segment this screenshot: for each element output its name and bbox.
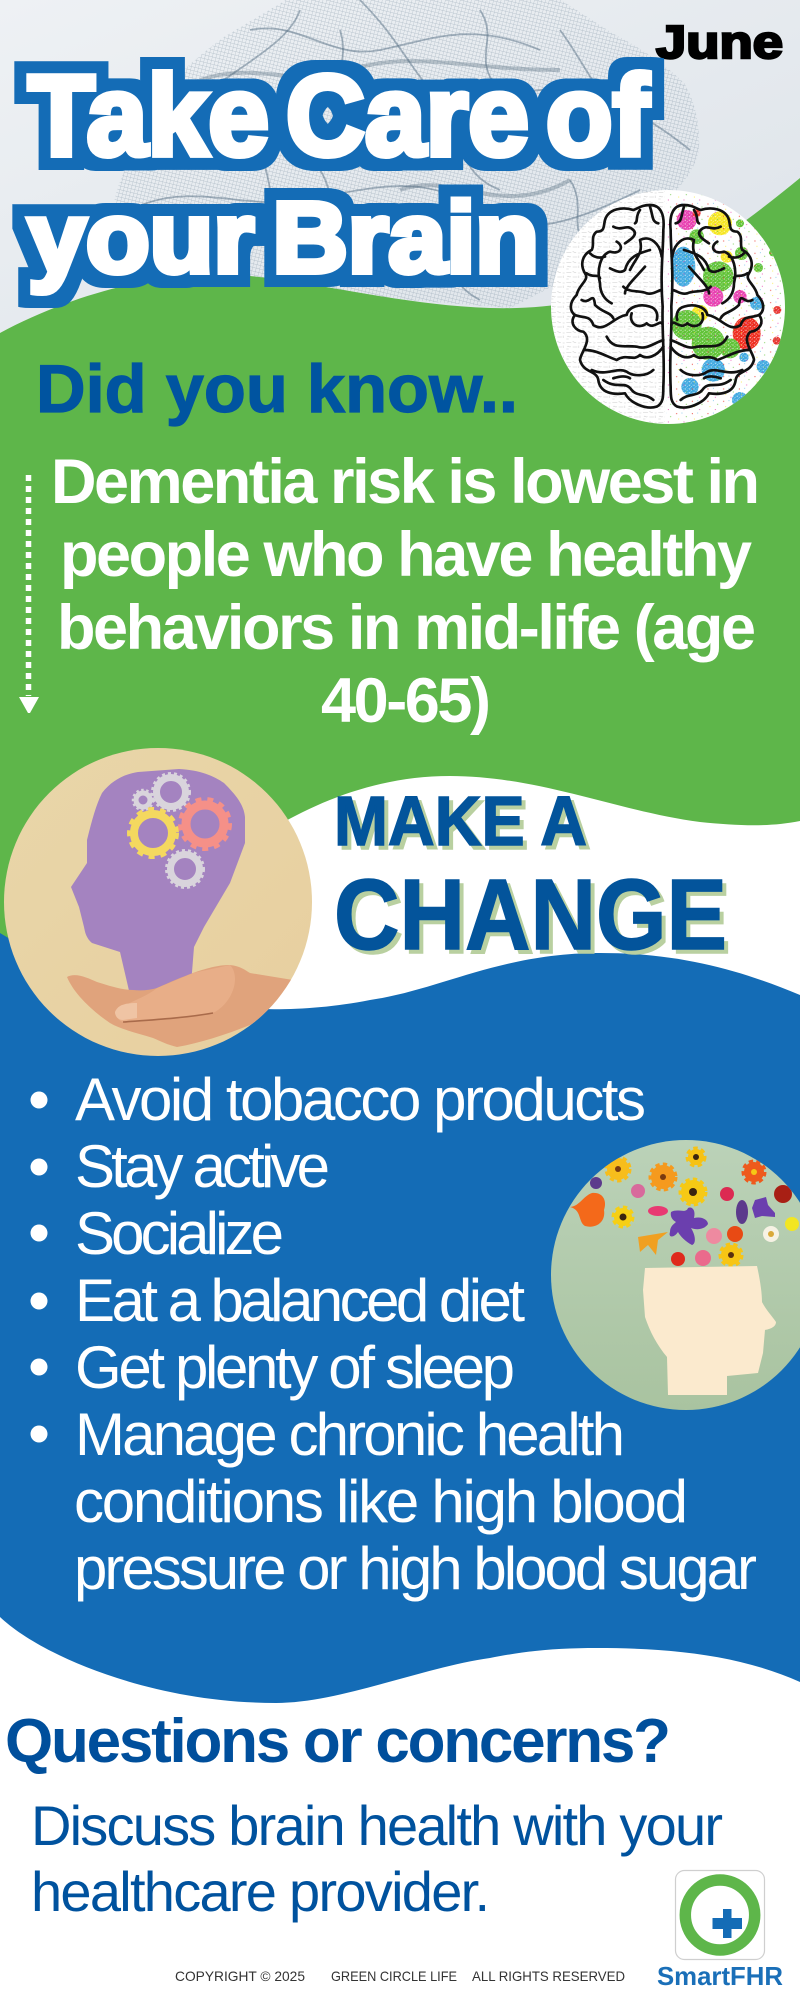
math scribble background [550,190,665,430]
make a: MAKE A [334,782,587,860]
discuss line 2: healthcare provider. [31,1860,490,1923]
title [28,53,650,294]
copyright: COPYRIGHT © 2025 [175,1968,305,1984]
bullet 5: Get plenty of sleep [75,1334,515,1401]
gears [129,774,230,888]
change shadow: CHANGE [338,863,731,975]
logo tile [676,1870,764,1960]
heading: did you know: Did you know.. [36,351,518,427]
bullet 6: Manage chronic health [75,1401,625,1468]
arrow: dotted down [19,475,39,713]
brain right hemisphere [670,205,763,408]
organisation: GREEN CIRCLE LIFE [331,1968,457,1984]
fact line 2: people who have healthy [60,520,752,590]
bullet 2: Stay active [75,1133,330,1200]
cream paper head [643,1266,776,1395]
icon: head with gears photo [4,748,312,1056]
change: CHANGE [334,859,727,971]
logo ring [685,1880,755,1950]
icon: split brain circle [550,190,785,430]
purple head silhouette [71,769,245,995]
fact line 4: 40-65) [321,666,491,736]
copyright footer [175,1968,625,1984]
make a change heading [334,782,731,975]
title line 2: your Brain [28,182,539,294]
heading: questions or concerns: Questions or concerns? [5,1707,671,1776]
green wave panel [0,178,800,1010]
logo wordmark: SmartFHR [657,1961,783,1991]
fact line 3: behaviors in mid-life (age [57,593,756,663]
logo plus [712,1909,742,1938]
mesh brain illustration [114,0,699,308]
bullet list [30,1066,757,1602]
smartfhr logo [657,1870,783,1991]
bullet 4: Eat a balanced diet [75,1267,525,1334]
hand [67,965,293,1047]
make a shadow: MAKE A [338,786,591,864]
brain left hemisphere [571,205,664,408]
month label: June [656,16,783,68]
bullet 6: conditions like high blood [74,1468,688,1535]
fact line 1: Dementia risk is lowest in [51,447,760,517]
rights: ALL RIGHTS RESERVED [472,1968,625,1984]
bullet 6: pressure or high blood sugar [74,1535,757,1602]
colour splatter [667,193,783,423]
bullet 1: Avoid tobacco products [75,1066,646,1133]
bullet 3: Socialize [75,1200,284,1267]
bullet 6 [30,1401,757,1602]
flowers [570,1149,799,1266]
dementia fact text [51,447,760,736]
blue wave panel [0,933,800,1703]
title line 1: Take Care of [28,53,650,180]
header backdrop [0,0,800,345]
discuss text [31,1794,723,1923]
discuss line 1: Discuss brain health with your [31,1794,723,1857]
icon: head with flowers photo [551,1140,800,1410]
